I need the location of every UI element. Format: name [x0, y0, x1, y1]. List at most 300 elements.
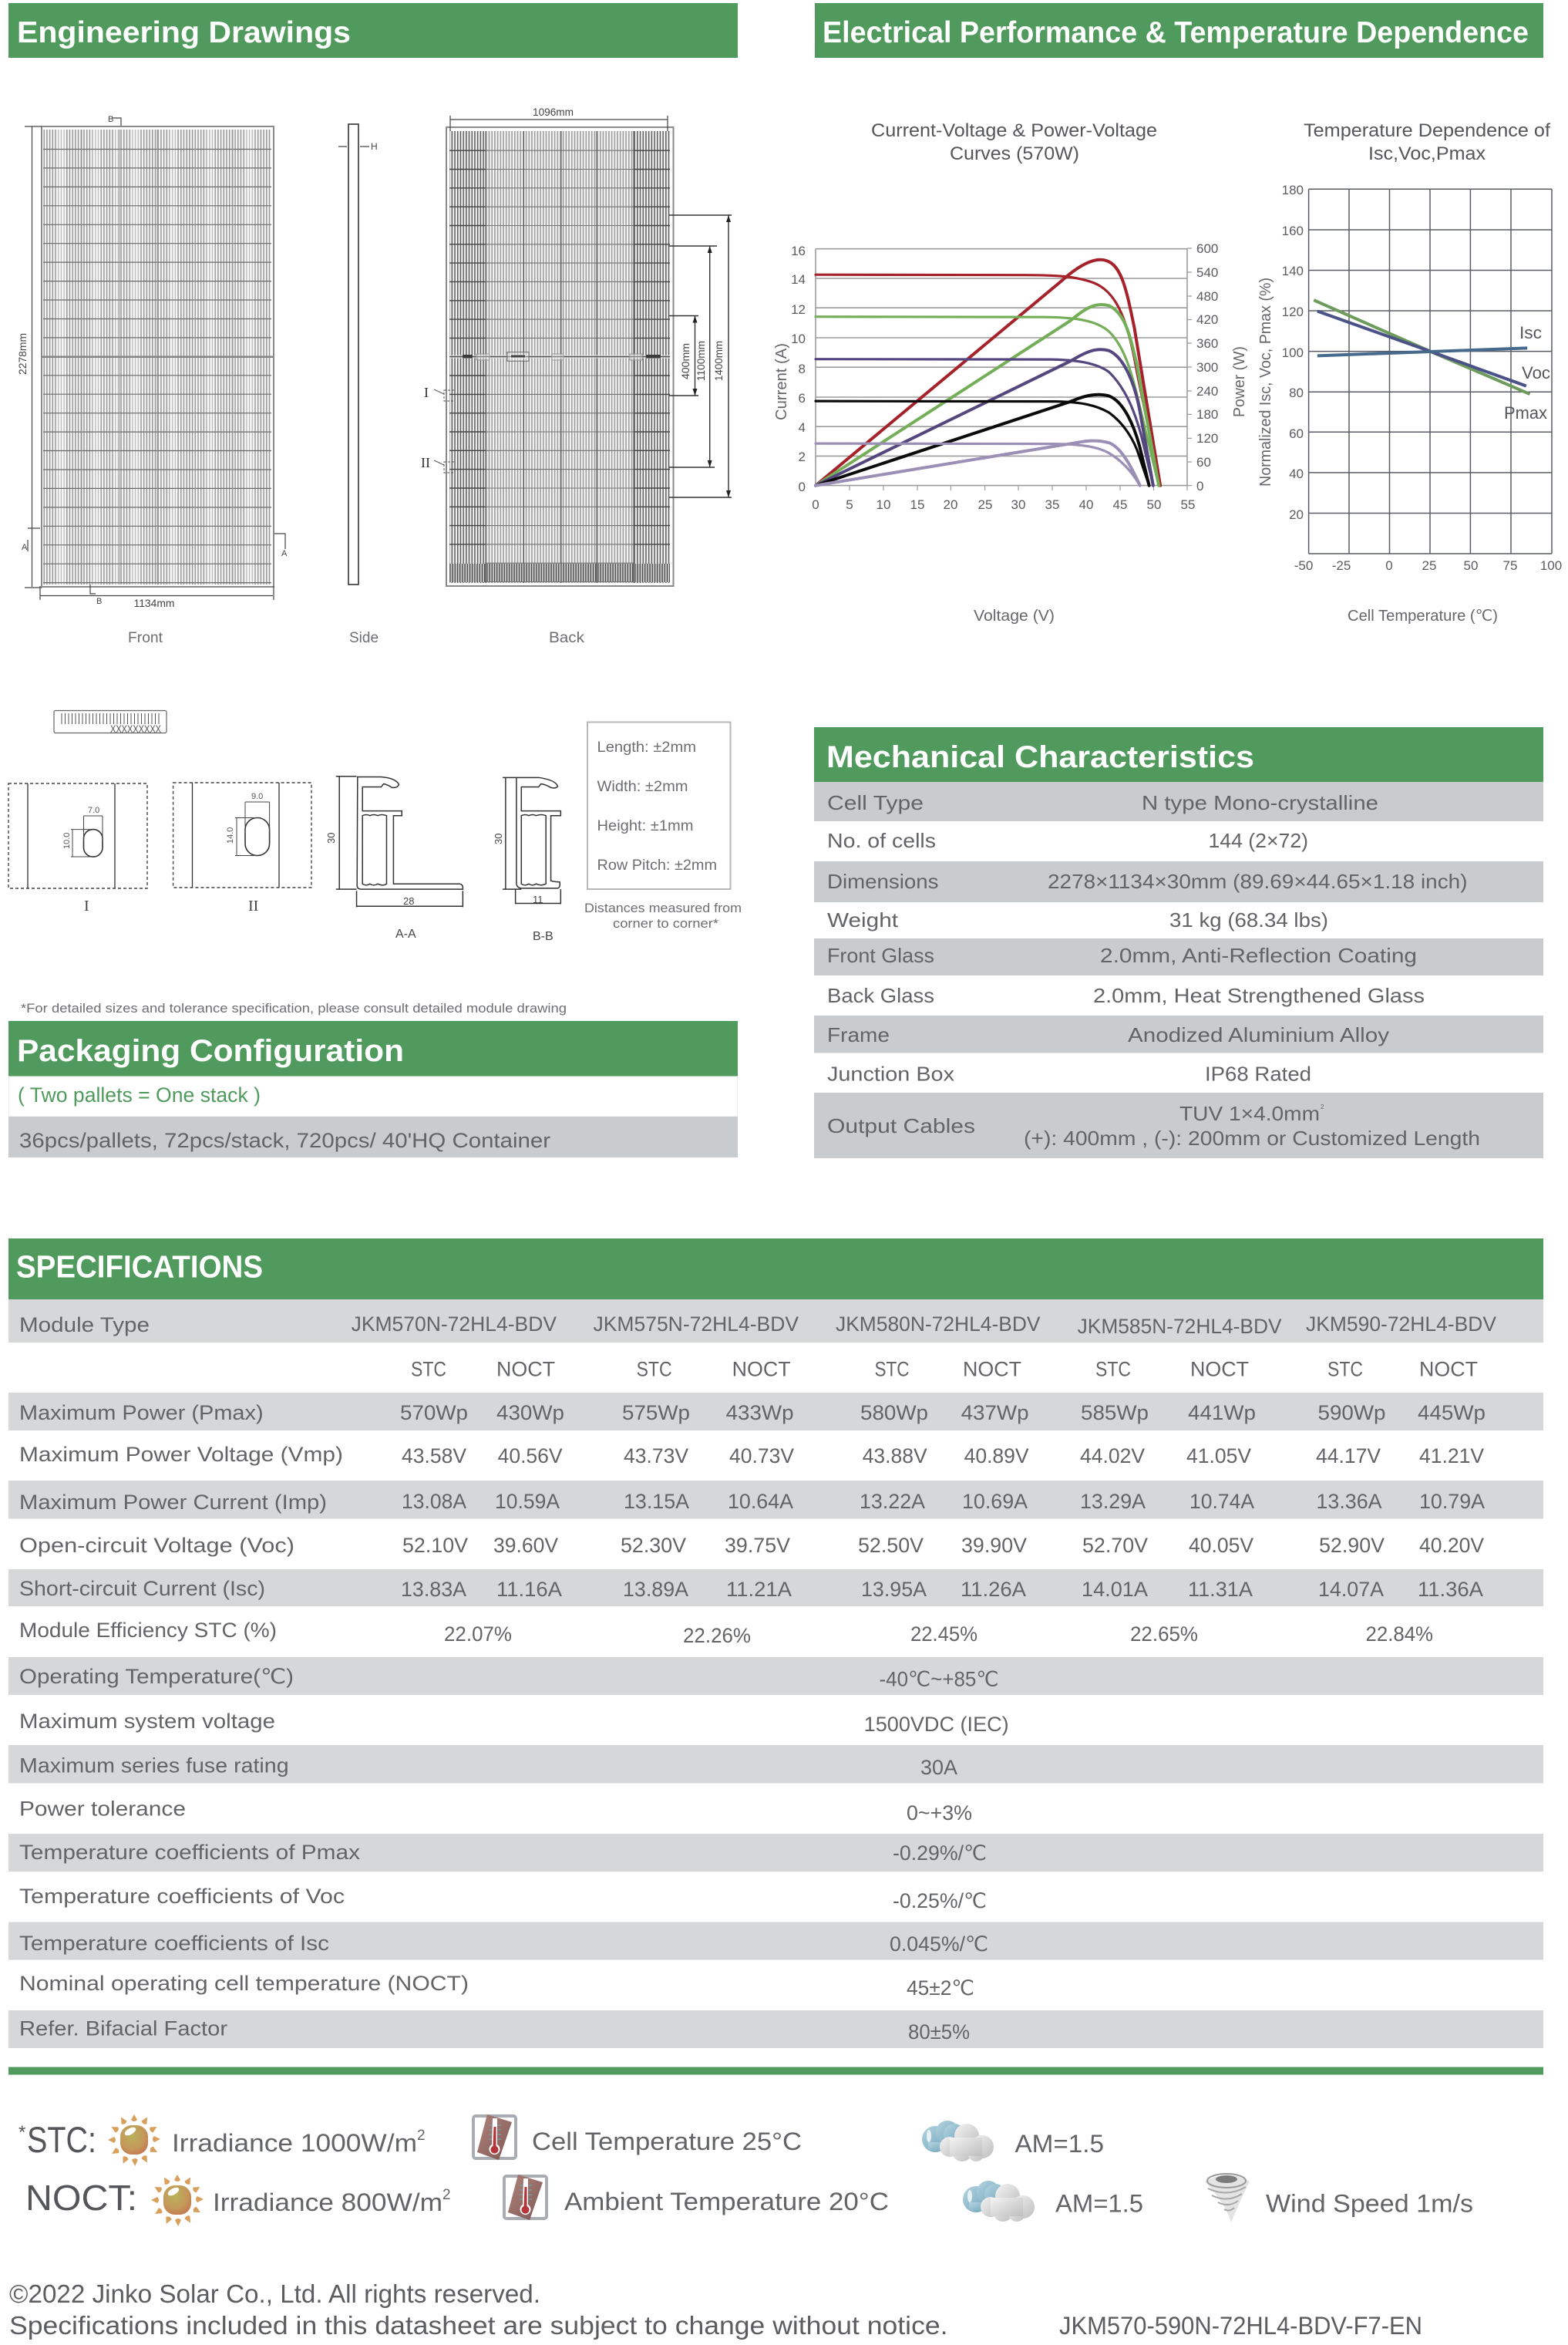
row: Output Cables	[814, 1093, 1543, 1158]
x axis labels: voltage: 10	[877, 497, 890, 512]
line labels	[1504, 323, 1550, 423]
row: Power tolerance: Power tolerance	[19, 1797, 186, 1820]
left axis labels: current: 6	[799, 391, 806, 406]
row: Open-circuit Voltage: 40.05V	[1189, 1534, 1253, 1557]
text: Irradiance 800W/m2: Irradiance 800W/m	[213, 2188, 442, 2216]
callouts: detail I and II	[421, 385, 455, 473]
row: Short-circuit Current: 13.95A	[861, 1578, 927, 1601]
line labels: Isc	[1519, 323, 1542, 342]
right axis labels: power: 120	[1196, 431, 1218, 446]
heading: SPECIFICATIONS: SPECIFICATIONS	[16, 1249, 263, 1285]
row: Dimensions: Dimensions	[827, 870, 939, 893]
y axis labels: 120	[1282, 305, 1304, 319]
footnote: *For detailed sizes and tolerance specification, please consult detailed module drawing	[21, 1001, 567, 1016]
right axis labels: power: 420	[1196, 312, 1218, 327]
row: Maximum Power: 445Wp	[1418, 1401, 1486, 1424]
note: distances measured: corner to corner*	[613, 916, 718, 931]
y axis labels: 160	[1282, 224, 1304, 238]
row: Module Type: JKM590-72HL4-BDV	[1306, 1312, 1496, 1336]
right axis labels: power: 60	[1196, 455, 1211, 470]
drawing: frame section A-A	[325, 777, 463, 941]
section markers: B	[108, 115, 113, 124]
row: Maximum Power Voltage: 41.21V	[1419, 1444, 1484, 1467]
row: Maximum Power: 441Wp	[1188, 1401, 1256, 1424]
row: Front Glass: Front Glass	[827, 944, 934, 967]
y axis labels: 40	[1289, 467, 1304, 481]
heading: Engineering Drawings: Engineering Drawings	[17, 16, 351, 49]
drawing: frame section B-B: 30	[493, 834, 504, 844]
row: Temperature coefficients of Pmax: Temperature coefficients of Pmax	[19, 1841, 361, 1864]
icon: cloud	[922, 2121, 994, 2161]
chart title: Temperature Dependence: Isc,Voc,Pmax	[1368, 143, 1486, 164]
row: Dimensions: 2278×1134×30mm (89.69×44.65×1.18 inch)	[1048, 870, 1468, 893]
row: Operating Temperature: -40℃~+85℃	[879, 1668, 999, 1691]
dimension: 400mm, 1100mm, 1400mm	[669, 215, 732, 497]
x axis labels: voltage: 5	[846, 497, 853, 512]
row: Module Type: Module Type	[19, 1313, 150, 1336]
left axis labels: current: 10	[791, 332, 806, 346]
row: Module Efficiency: 22.45%	[910, 1622, 977, 1646]
row: Junction Box	[827, 1063, 1311, 1086]
row: Maximum Power: Maximum Power (Pmax)	[19, 1401, 264, 1424]
row: Short-circuit Current: Short-circuit Current (Isc)	[19, 1577, 265, 1600]
x axis labels: voltage: 0	[812, 497, 819, 512]
label: I: I	[84, 898, 89, 915]
drawing: detail II mounting hole	[173, 783, 311, 915]
section markers	[22, 115, 288, 606]
right axis labels: power: 180	[1196, 407, 1218, 422]
note: distances measured: Distances measured from	[584, 901, 742, 915]
row: Front Glass: 2.0mm, Anti-Reflection Coating	[1100, 944, 1417, 967]
drawing: barcode label: XXXXXXXXX	[110, 723, 162, 735]
row: Maximum Power Current: 10.64A	[728, 1490, 793, 1513]
row: Maximum Power Voltage: 44.02V	[1080, 1444, 1145, 1467]
row: Maximum series fuse rating	[8, 1745, 1543, 1783]
drawing: frame section B-B	[493, 777, 560, 943]
drawing: detail I mounting hole: 10.0	[62, 833, 72, 849]
row: Temperature coefficients of Voc: Temperature coefficients of Voc	[19, 1885, 345, 1908]
label: II: II	[248, 898, 258, 915]
heading: Mechanical Characteristics	[814, 727, 1543, 782]
row: STC / NOCT column headers: STC	[1327, 1357, 1363, 1380]
y axis labels: 60	[1289, 426, 1304, 441]
row: Weight: 31 kg (68.34 lbs)	[1169, 908, 1328, 932]
row: Cell Type	[814, 782, 1543, 821]
x axis labels: 50	[1464, 558, 1478, 573]
axis title: Normalized Isc, Voc, Pmax: Normalized Isc, Voc, Pmax (%)	[1257, 278, 1274, 487]
right axis labels: power: 240	[1196, 384, 1218, 399]
row: Temperature coefficients of Pmax: -0.29%/℃	[893, 1841, 987, 1865]
row: Frame: Frame	[827, 1023, 890, 1046]
dimension: 400mm, 1100mm, 1400mm: 1400mm	[712, 341, 725, 381]
row: Back Glass: Back Glass	[827, 984, 934, 1007]
x axis labels: voltage: 50	[1147, 497, 1161, 512]
row: STC / NOCT column headers: STC	[637, 1357, 672, 1380]
row: Maximum series fuse rating: 30A	[920, 1756, 957, 1779]
row: Open-circuit Voltage: 39.90V	[961, 1534, 1027, 1557]
copyright text: ©2022 Jinko Solar Co., Ltd. All rights reserved.	[9, 2279, 540, 2308]
row: Refer. Bifacial Factor: Refer. Bifacial Factor	[19, 2017, 227, 2040]
row: Maximum series fuse rating: Maximum series fuse rating	[19, 1754, 289, 1777]
row: Frame	[814, 1016, 1543, 1053]
panel: tolerances: Height: ±1mm	[597, 818, 694, 834]
heading: Packaging Configuration	[8, 1021, 738, 1076]
row: Open-circuit Voltage: 39.75V	[725, 1534, 790, 1557]
row: Module Type: JKM570N-72HL4-BDV	[352, 1312, 557, 1336]
row: Temperature coefficients of Isc	[8, 1922, 1543, 1960]
row: Maximum Power Voltage: 40.56V	[498, 1444, 563, 1467]
right axis labels: power: 0	[1196, 479, 1203, 494]
panel: Packaging Configuration	[8, 1021, 738, 1157]
note: distances measured	[584, 901, 742, 931]
row: Maximum Power Voltage: 40.89V	[964, 1444, 1029, 1467]
text: Irradiance 1000W/m2: Irradiance 1000W/m	[172, 2129, 417, 2157]
drawing: side view of module: H	[371, 141, 378, 152]
text: Irradiance 1000W/m2: 2	[417, 2128, 426, 2144]
row: Temperature coefficients of Isc: Temperature coefficients of Isc	[19, 1932, 329, 1955]
dimension: 1096mm: 1096mm	[533, 106, 574, 118]
row: Maximum Power Voltage: 43.73V	[624, 1444, 688, 1467]
row: Maximum Power: 590Wp	[1318, 1401, 1386, 1424]
row: Maximum Power Voltage: 40.73V	[729, 1444, 794, 1467]
row: Open-circuit Voltage: 52.70V	[1082, 1534, 1148, 1557]
icon: thermometer	[504, 2175, 547, 2220]
section markers: A	[281, 549, 288, 558]
right axis labels: power	[1196, 241, 1218, 494]
row: Open-circuit Voltage: 52.10V	[402, 1534, 468, 1557]
heading: SPECIFICATIONS	[8, 1238, 1543, 1299]
x axis labels: 100	[1540, 558, 1562, 573]
axis title: Cell Temperature: Cell Temperature (℃)	[1348, 608, 1498, 625]
axis title: Current (A): Current (A)	[773, 343, 790, 420]
section markers: A	[22, 543, 28, 552]
row: Refer. Bifacial Factor	[8, 2010, 1543, 2048]
y axis labels: 140	[1282, 264, 1304, 278]
drawing: detail I mounting hole	[8, 783, 147, 915]
panel: tolerances: Width: ±2mm	[597, 779, 688, 795]
row: Maximum Power: 437Wp	[961, 1401, 1029, 1424]
heading: Electrical Performance & Temperature Dependence: Electrical Performance & Temperature Dependence	[823, 16, 1529, 49]
row: Maximum Power Current: 10.74A	[1189, 1490, 1254, 1513]
row: Maximum Power Voltage: 43.88V	[863, 1444, 927, 1467]
row: Maximum Power Current: 10.59A	[495, 1490, 560, 1513]
row: Power tolerance: 0~+3%	[907, 1801, 972, 1824]
right axis labels: power: 600	[1196, 241, 1218, 256]
row: Maximum Power Current: 10.69A	[962, 1490, 1028, 1513]
x axis labels: voltage: 15	[910, 497, 924, 512]
row: Dimensions	[814, 861, 1543, 902]
x axis labels: voltage: 55	[1181, 497, 1195, 512]
row: Short-circuit Current: 14.01A	[1082, 1578, 1148, 1601]
y axis labels: 20	[1289, 507, 1304, 522]
row: Maximum Power Current: 10.79A	[1419, 1490, 1485, 1513]
row: Junction Box: IP68 Rated	[1205, 1063, 1311, 1086]
chart title: Current-Voltage & Power-Voltage Curves	[871, 120, 1157, 164]
row: Operating Temperature	[8, 1657, 1543, 1695]
row: Nominal operating cell temperature: Nominal operating cell temperature (NOCT)	[19, 1972, 469, 1995]
drawing: frame section A-A: 30	[325, 833, 337, 844]
label: NOCT: NOCT:	[25, 2178, 137, 2218]
row: Module Type: JKM585N-72HL4-BDV	[1078, 1315, 1282, 1338]
row: Maximum system voltage: 1500VDC (IEC)	[864, 1713, 1009, 1736]
row: Maximum Power Current: 13.22A	[860, 1490, 925, 1513]
row: Module Efficiency: 22.65%	[1130, 1622, 1198, 1646]
icon: sun	[108, 2114, 160, 2166]
text: Ambient Temperature 20°C: Ambient Temperature 20°C	[564, 2188, 889, 2215]
row: two pallets: ( Two pallets = One stack )	[18, 1083, 261, 1107]
row: Maximum Power Current: Maximum Power Current (Imp)	[19, 1491, 327, 1514]
row: Refer. Bifacial Factor: 80±5%	[908, 2020, 970, 2043]
row: container quantities	[8, 1117, 738, 1157]
text: AM=1.5: AM=1.5	[1055, 2190, 1143, 2218]
x axis labels	[1294, 558, 1562, 573]
row: Maximum Power Voltage: Maximum Power Voltage (Vmp)	[19, 1443, 343, 1466]
dimension: 400mm, 1100mm, 1400mm: 1100mm	[695, 341, 707, 381]
row: Maximum Power Current: 13.29A	[1080, 1490, 1146, 1513]
panel: tolerances: Row Pitch: ±2mm	[597, 857, 717, 874]
label: STC: STC:	[27, 2119, 96, 2160]
axis title: Power (W): Power (W)	[1231, 346, 1248, 417]
row: Back Glass	[827, 984, 1425, 1007]
copyright text: Specifications included in this datasheet are subject to change without notice.	[9, 2311, 948, 2340]
section markers: B	[96, 597, 102, 606]
row: Module Type: JKM575N-72HL4-BDV	[594, 1312, 799, 1336]
x axis labels: voltage: 35	[1045, 497, 1059, 512]
row: Module Type	[8, 1299, 1543, 1343]
dimension: 400mm, 1100mm, 1400mm: 400mm	[679, 343, 691, 379]
row: Short-circuit Current: 11.26A	[961, 1578, 1026, 1601]
x axis labels: -50	[1294, 558, 1313, 573]
x axis labels: voltage: 45	[1113, 497, 1127, 512]
row: Short-circuit Current: 11.16A	[496, 1578, 562, 1601]
row: Maximum Power Current	[8, 1481, 1543, 1519]
line chart: current-voltage and power-voltage curves	[773, 241, 1248, 625]
text: AM=1.5: AM=1.5	[1014, 2130, 1104, 2158]
drawing: frame section B-B: 11	[533, 894, 543, 905]
row: Short-circuit Current: 13.83A	[401, 1578, 466, 1601]
row: STC / NOCT column headers: STC	[874, 1357, 910, 1380]
row: Short-circuit Current: 11.36A	[1418, 1578, 1483, 1601]
row: Front Glass	[814, 938, 1543, 975]
row: Output Cables: TUV 1×4.0mm	[1179, 1102, 1320, 1125]
axis title: Voltage (V): Voltage (V)	[974, 608, 1055, 625]
row: STC / NOCT column headers	[411, 1357, 1478, 1380]
chart title: Current-Voltage & Power-Voltage Curves: Curves (570W)	[950, 143, 1079, 164]
drawing: frame section A-A: 28	[403, 895, 414, 907]
drawing: front view of module	[16, 115, 288, 609]
drawing: back view of module	[421, 106, 732, 586]
heading: Electrical Performance & Temperature Dependence	[815, 3, 1543, 58]
left axis labels: current: 12	[791, 302, 806, 317]
row: Module Efficiency: Module Efficiency STC (%)	[19, 1619, 277, 1642]
row: Maximum Power Voltage: 44.17V	[1316, 1444, 1381, 1467]
right axis labels: power: 360	[1196, 336, 1218, 351]
legend: STC conditions	[19, 2114, 1104, 2166]
left axis labels: current: 2	[799, 450, 806, 464]
y axis labels	[1282, 183, 1304, 522]
row: Maximum system voltage	[19, 1710, 1009, 1736]
label: Front: Front	[128, 630, 163, 646]
text: Irradiance 800W/m2: 2	[442, 2187, 451, 2203]
row: Maximum Power: 575Wp	[622, 1401, 690, 1424]
panel: Mechanical Characteristics	[814, 727, 1543, 1158]
row: STC / NOCT column headers: NOCT	[496, 1357, 555, 1380]
icon: tornado	[1205, 2174, 1250, 2222]
row: container quantities: 36pcs/pallets, 72pcs/stack, 720pcs/ 40'HQ Container	[19, 1129, 550, 1152]
line labels: Voc	[1522, 363, 1550, 382]
left axis labels: current: 4	[799, 420, 806, 435]
row: Frame: Anodized Aluminium Alloy	[1128, 1023, 1389, 1046]
row: Back Glass: 2.0mm, Heat Strengthened Glass	[1093, 984, 1425, 1007]
drawing: barcode label	[54, 711, 167, 735]
panel: tolerances	[587, 722, 731, 889]
left axis labels: current: 14	[791, 272, 806, 287]
text: Cell Temperature 25°C: Cell Temperature 25°C	[532, 2128, 802, 2155]
row: Weight	[827, 908, 1328, 932]
row: Open-circuit Voltage: Open-circuit Voltage (Voc)	[19, 1534, 294, 1557]
label: A-A: A-A	[395, 928, 416, 941]
row: Weight: Weight	[827, 908, 899, 932]
row: Open-circuit Voltage: 39.60V	[493, 1534, 558, 1557]
x axis labels: voltage: 40	[1079, 497, 1093, 512]
row: two pallets	[9, 1076, 737, 1117]
row: Open-circuit Voltage	[19, 1534, 1484, 1557]
row: Junction Box: Junction Box	[827, 1063, 954, 1086]
dimension: 2278mm: 2278mm	[16, 333, 29, 375]
x axis labels: voltage	[812, 497, 1195, 512]
row: Cell Type: Cell Type	[827, 791, 924, 814]
row: Maximum system voltage: Maximum system voltage	[19, 1710, 275, 1733]
row: Short-circuit Current: 11.31A	[1188, 1578, 1253, 1601]
row: Maximum Power: 433Wp	[726, 1401, 794, 1424]
junction boxes row	[449, 352, 670, 361]
row: Open-circuit Voltage: 52.90V	[1319, 1534, 1385, 1557]
panel: Specifications table	[8, 1238, 1543, 2048]
chart title: Current-Voltage & Power-Voltage Curves: Current-Voltage & Power-Voltage	[871, 120, 1157, 141]
x axis labels: 75	[1503, 558, 1517, 573]
left axis labels: current	[791, 244, 806, 494]
y axis labels: 180	[1282, 183, 1304, 197]
row: Temperature coefficients of Voc: -0.25%/℃	[893, 1889, 987, 1912]
chart title: Temperature Dependence	[1304, 120, 1550, 164]
row: Maximum Power: 585Wp	[1081, 1401, 1149, 1424]
row: Module Efficiency: 22.84%	[1366, 1622, 1433, 1646]
row: Module Efficiency: 22.26%	[683, 1624, 751, 1647]
row: Maximum Power: 580Wp	[860, 1401, 928, 1424]
row: Short-circuit Current	[8, 1569, 1543, 1606]
right axis labels: power: 540	[1196, 265, 1218, 280]
row: Maximum Power Current: 13.36A	[1317, 1490, 1381, 1513]
line labels: Pmax	[1504, 403, 1547, 423]
row: No. of cells	[827, 829, 1308, 852]
row: Module Efficiency	[19, 1619, 1433, 1647]
document code: JKM570-590N-72HL4-BDV-F7-EN	[1059, 2312, 1422, 2340]
row: STC / NOCT column headers: NOCT	[732, 1357, 791, 1380]
row: Cell Type: N type Mono-crystalline	[1142, 791, 1378, 814]
heading: Mechanical Characteristics: Mechanical Characteristics	[826, 740, 1254, 774]
label: Side: Side	[349, 630, 379, 646]
row: Nominal operating cell temperature	[19, 1972, 974, 2000]
row: Maximum Power Voltage: 43.58V	[402, 1444, 466, 1467]
row: STC / NOCT column headers: STC	[1095, 1357, 1131, 1380]
x axis labels: -25	[1332, 558, 1351, 573]
row: Operating Temperature: Operating Temperature(℃)	[19, 1665, 294, 1688]
dimension: 1134mm: 1134mm	[134, 597, 174, 609]
row: Nominal operating cell temperature: 45±2℃	[907, 1976, 974, 2000]
y axis labels: 80	[1289, 386, 1304, 400]
row: Short-circuit Current: 13.89A	[623, 1578, 688, 1601]
row: No. of cells: 144 (2×72)	[1209, 829, 1308, 852]
row: Maximum Power Voltage: 41.05V	[1186, 1444, 1251, 1467]
row: Power tolerance	[19, 1797, 972, 1824]
row: Maximum Power Current: 13.08A	[402, 1490, 466, 1513]
panel: tolerances: Length: ±2mm	[597, 740, 696, 756]
row: No. of cells: No. of cells	[827, 829, 936, 852]
row: Open-circuit Voltage: 40.20V	[1419, 1534, 1484, 1557]
x axis labels: 25	[1422, 558, 1436, 573]
row: Output Cables: Output Cables	[827, 1114, 975, 1137]
chart title: Temperature Dependence: Temperature Dependence of	[1304, 120, 1550, 141]
callouts: detail I and II: II	[421, 455, 430, 470]
x axis labels: voltage: 30	[1011, 497, 1025, 512]
row: STC / NOCT column headers: NOCT	[1419, 1357, 1478, 1380]
row: Open-circuit Voltage: 52.50V	[858, 1534, 924, 1557]
row: Temperature coefficients of Isc: 0.045%/℃	[890, 1932, 988, 1956]
text: Wind Speed 1m/s: Wind Speed 1m/s	[1266, 2190, 1473, 2218]
row: Short-circuit Current: 11.21A	[726, 1578, 792, 1601]
drawing: detail I mounting hole: 7.0	[88, 806, 99, 815]
right axis labels: power: 300	[1196, 360, 1218, 375]
copyright text	[9, 2279, 948, 2340]
row: Short-circuit Current: 14.07A	[1318, 1578, 1384, 1601]
row: STC / NOCT column headers: NOCT	[1190, 1357, 1249, 1380]
right axis labels: power: 480	[1196, 289, 1218, 304]
row: STC / NOCT column headers: NOCT	[963, 1357, 1021, 1380]
legend: NOCT conditions	[25, 2174, 1473, 2226]
row: STC / NOCT column headers: STC	[411, 1357, 446, 1380]
label: STC: *	[19, 2122, 25, 2143]
y axis labels: 100	[1282, 345, 1304, 360]
row: Temperature coefficients of Pmax	[8, 1834, 1543, 1872]
row: Temperature coefficients of Voc	[19, 1885, 987, 1912]
row: Maximum Power Voltage	[19, 1443, 1484, 1467]
left axis labels: current: 0	[799, 480, 806, 494]
row: Output Cables: (+): 400mm , (-): 200mm or Customized Length	[1024, 1127, 1480, 1150]
x axis labels: voltage: 25	[978, 497, 992, 512]
heading: Engineering Drawings	[8, 3, 738, 58]
x axis labels: voltage: 20	[944, 497, 957, 512]
drawing: detail II mounting hole: 14.0	[226, 827, 235, 844]
green divider bar	[8, 2067, 1543, 2074]
row: Maximum Power	[8, 1393, 1543, 1430]
drawing: detail II mounting hole: 9.0	[251, 792, 263, 801]
line chart: temperature dependence	[1257, 183, 1562, 625]
icon: cloud	[963, 2181, 1035, 2222]
row: Open-circuit Voltage: 52.30V	[621, 1534, 686, 1557]
row: Maximum Power Current: 13.15A	[624, 1490, 689, 1513]
row: Maximum Power: 570Wp	[400, 1401, 468, 1424]
drawing: side view of module	[338, 124, 378, 585]
callouts: detail I and II: I	[424, 385, 429, 400]
label: B-B: B-B	[533, 930, 554, 943]
row: Module Type: JKM580N-72HL4-BDV	[836, 1312, 1041, 1336]
row: Maximum Power: 430Wp	[496, 1401, 564, 1424]
heading: Packaging Configuration: Packaging Configuration	[17, 1034, 404, 1068]
dimension: 1096mm	[450, 106, 668, 131]
left axis labels: current: 8	[799, 362, 806, 376]
row: Module Efficiency: 22.07%	[444, 1622, 512, 1646]
icon: thermometer	[473, 2114, 516, 2160]
